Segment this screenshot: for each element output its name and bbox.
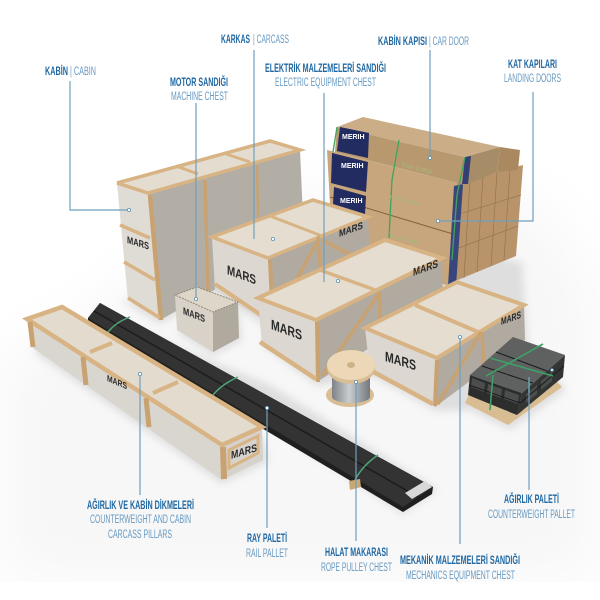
callout: machine chest: MACHINE CHEST (171, 91, 228, 103)
callout: counterweight and cabin carcass pillars: CARCASS PILLARS (108, 529, 172, 541)
callout: electric equipment chest (265, 62, 386, 283)
logo: mars on mechanics crate: MARS (385, 349, 416, 374)
callout: electric equipment chest: ELEKTRİK MALZEMELERİ SANDIĞI (265, 62, 386, 75)
crate: electric equipment (258, 240, 443, 382)
cardboard pallet: landing doors and car door: Your Extra (400, 161, 433, 176)
counterweight pallet (465, 337, 565, 425)
callout: mechanics equipment chest: MEKANİK MALZEMELERİ SANDIĞI (400, 554, 520, 567)
cardboard pallet: landing doors and car door: MERIH (342, 134, 365, 141)
callout: rope pulley chest: ROPE PULLEY CHEST (321, 562, 392, 574)
crate: mechanics equipment (365, 282, 525, 407)
callout: car door: KABİN KAPISI (378, 35, 427, 48)
callout: counterweight pallet: AĞIRLIK PALETİ (504, 493, 559, 506)
callout: mechanics equipment chest (400, 335, 520, 582)
callout: carcass: | CARCASS (253, 34, 289, 46)
floor shading (0, 200, 600, 600)
cardboard pallet: landing doors and car door: MERIH (340, 198, 363, 205)
cardboard pallet: landing doors and car door: Your Extra (388, 193, 421, 208)
callout: cabin: | CABIN (70, 66, 96, 78)
chest: machine (175, 287, 239, 352)
rope pulley spool (326, 350, 375, 407)
callout: rail pallet: RAIL PALLET (246, 548, 288, 560)
callout: landing doors (436, 59, 561, 223)
logo: mars on cabin crate: MARS (127, 235, 149, 253)
callout: counterweight pallet (488, 369, 575, 521)
callout: rail pallet: RAY PALETİ (247, 532, 287, 545)
logo: mars on machine chest: MARS (183, 306, 205, 325)
crate: counterweight and cabin carcass pillars: MARS (231, 442, 257, 462)
callout: car door: | CAR DOOR (429, 36, 469, 48)
callout: counterweight and cabin carcass pillars: AĞIRLIK VE KABİN DİKMELERİ (87, 499, 194, 512)
callout: cabin: KABİN (45, 65, 68, 78)
crate: carcass (212, 200, 370, 326)
callout: machine chest: MOTOR SANDIĞI (170, 76, 228, 89)
callout: rope pulley chest: HALAT MAKARASI (325, 547, 388, 559)
crate: electric equipment: MARS (413, 258, 438, 279)
callout: electric equipment chest: ELECTRIC EQUIPMENT CHEST (275, 77, 376, 89)
callout: carcass: KARKAS (221, 34, 250, 46)
crate: carcass: MARS (339, 221, 363, 240)
logo: mars on pillar crate: MARS (107, 373, 127, 391)
callout: cabin (45, 65, 131, 212)
callout: carcass (221, 34, 289, 241)
logo: mars on carcass crate: MARS (227, 262, 256, 287)
crate: mechanics equipment: MARS (501, 310, 521, 328)
cardboard pallet: landing doors and car door: MERIH (341, 163, 364, 170)
callout: rail pallet (246, 406, 288, 560)
logo: mars on electric crate: MARS (271, 317, 302, 344)
callout: mechanics equipment chest: MECHANICS EQUIPMENT CHEST (406, 570, 515, 582)
callout: landing doors: LANDING DOORS (504, 73, 561, 85)
callout: rope pulley chest (321, 380, 392, 574)
callout: counterweight and cabin carcass pillars (87, 372, 194, 541)
callout: machine chest (170, 76, 228, 301)
cardboard pallet: landing doors and car door: Your Extra (388, 232, 421, 247)
cardboard pallet: landing doors and car door (327, 117, 523, 286)
callout: counterweight and cabin carcass pillars: COUNTERWEIGHT AND CABIN (90, 514, 191, 526)
callout: car door (378, 35, 469, 160)
crate: counterweight and cabin carcass pillars (27, 307, 263, 480)
crate: cabin (117, 141, 304, 320)
callout: landing doors: KAT KAPILARI (508, 59, 557, 71)
rail pallet (88, 303, 433, 512)
